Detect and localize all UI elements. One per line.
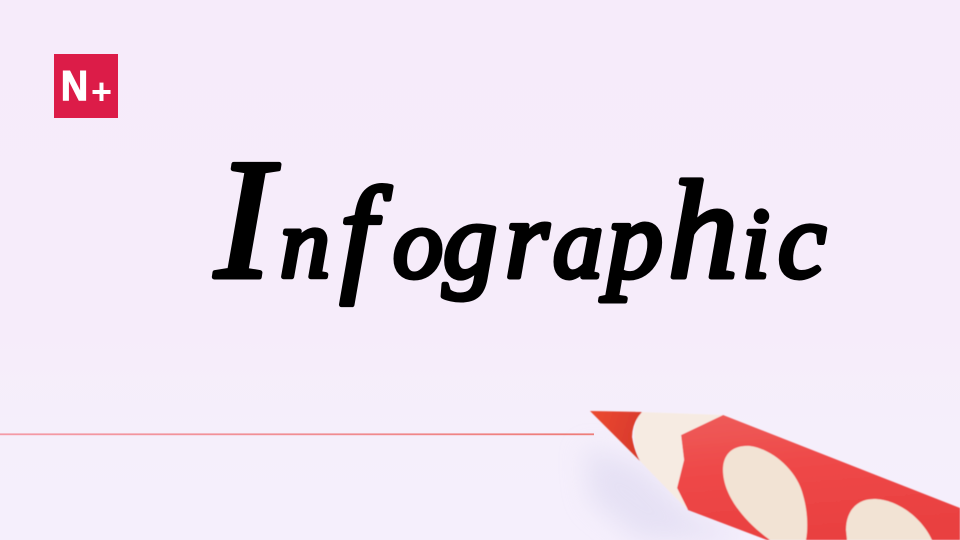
pencil xyxy=(590,411,960,540)
pencil line xyxy=(0,433,594,435)
logo: N+: N xyxy=(61,62,88,109)
title: a xyxy=(553,188,603,299)
logo: N+: + xyxy=(91,71,112,112)
pencil shadow xyxy=(585,447,750,540)
logo: N+ xyxy=(54,54,118,118)
title: i xyxy=(742,188,770,299)
pencil lead tip xyxy=(590,411,642,461)
pencil wood xyxy=(634,412,723,510)
title: I xyxy=(214,125,279,315)
title: g xyxy=(443,182,497,301)
title: o xyxy=(393,188,443,299)
wood spot 2 xyxy=(846,499,932,540)
title: c xyxy=(778,182,826,301)
title: f xyxy=(340,162,392,306)
pencil body xyxy=(677,415,960,540)
title: r xyxy=(505,178,549,302)
title: h xyxy=(668,153,738,308)
title: n xyxy=(280,188,330,299)
wood spot 1 xyxy=(723,446,807,540)
title: p xyxy=(600,178,663,302)
